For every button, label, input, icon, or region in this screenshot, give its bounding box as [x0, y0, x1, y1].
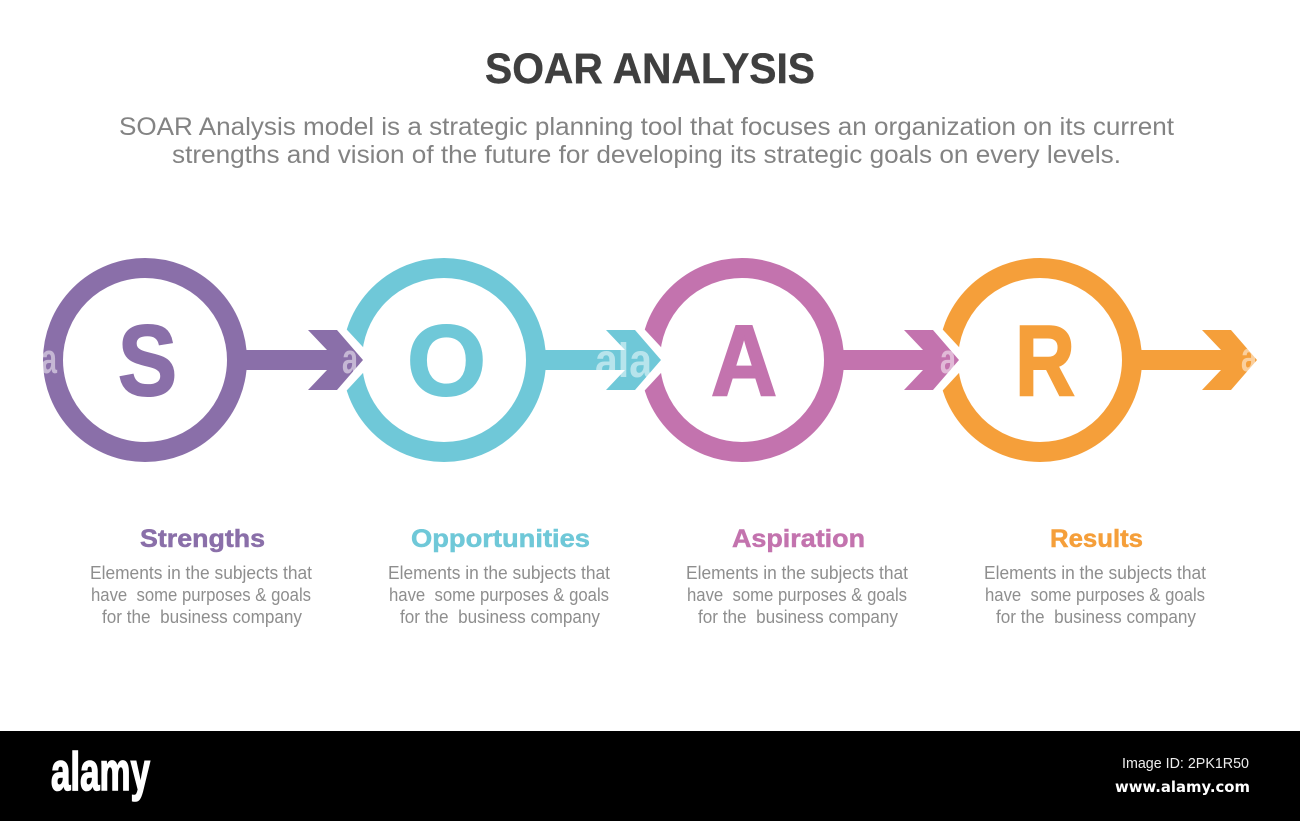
website: www.alamy.com [1115, 778, 1250, 796]
intro text: SOAR Analysis model is a strategic planning tool that focuses an organization on its current [119, 113, 1174, 141]
watermark fragments [41, 333, 1257, 388]
watermark fragments: ala [595, 335, 652, 388]
column: Opportunities: Elements in the subjects that [388, 563, 610, 583]
column: Results: have some purposes & goals [985, 585, 1205, 605]
arrow: R out [1140, 330, 1257, 390]
column: Strengths: for the business company [102, 607, 302, 627]
title: SOAR ANALYSIS [485, 45, 815, 93]
column: Results: for the business company [996, 607, 1196, 627]
column: Opportunities: have some purposes & goals [389, 585, 609, 605]
circle: O: O [407, 305, 486, 417]
circle: S [53, 268, 237, 452]
column: Strengths: Strengths [140, 525, 265, 553]
column: Results: Elements in the subjects that [984, 563, 1206, 583]
column: Opportunities: Opportunities [411, 525, 590, 553]
column: Aspiration: Aspiration [732, 525, 865, 553]
intro text [119, 113, 1174, 169]
circle: R [948, 268, 1132, 452]
ring gaps [320, 318, 971, 402]
arrow: O to A [544, 330, 661, 390]
process diagram [41, 268, 1257, 452]
alamy logo: alamy [51, 742, 150, 802]
watermark fragments: a [41, 335, 57, 382]
column: Opportunities [388, 525, 610, 627]
circle: A [650, 268, 834, 452]
arrow: S to O [246, 330, 363, 390]
image id: Image ID: 2PK1R50 [1122, 756, 1249, 772]
column: Results [984, 525, 1206, 627]
column: Strengths: Elements in the subjects that [90, 563, 312, 583]
column: Strengths: have some purposes & goals [91, 585, 311, 605]
watermark fragments: a [940, 335, 956, 382]
column: Opportunities: for the business company [400, 607, 600, 627]
watermark fragments: a [342, 335, 358, 382]
circle: O [352, 268, 536, 452]
circle: S: S [118, 305, 177, 417]
column: Aspiration: Elements in the subjects that [686, 563, 908, 583]
column: Strengths [90, 525, 312, 627]
column: Aspiration [686, 525, 908, 627]
footer band [0, 731, 1300, 821]
intro text: strengths and vision of the future for developing its strategic goals on every levels. [172, 141, 1121, 169]
arrow: A to R [842, 330, 959, 390]
column: Aspiration: have some purposes & goals [687, 585, 907, 605]
circle: A: A [711, 305, 777, 417]
watermark fragments: a [1241, 333, 1257, 380]
column: Aspiration: for the business company [698, 607, 898, 627]
column: Results: Results [1050, 525, 1143, 553]
circle: R: R [1015, 305, 1075, 417]
